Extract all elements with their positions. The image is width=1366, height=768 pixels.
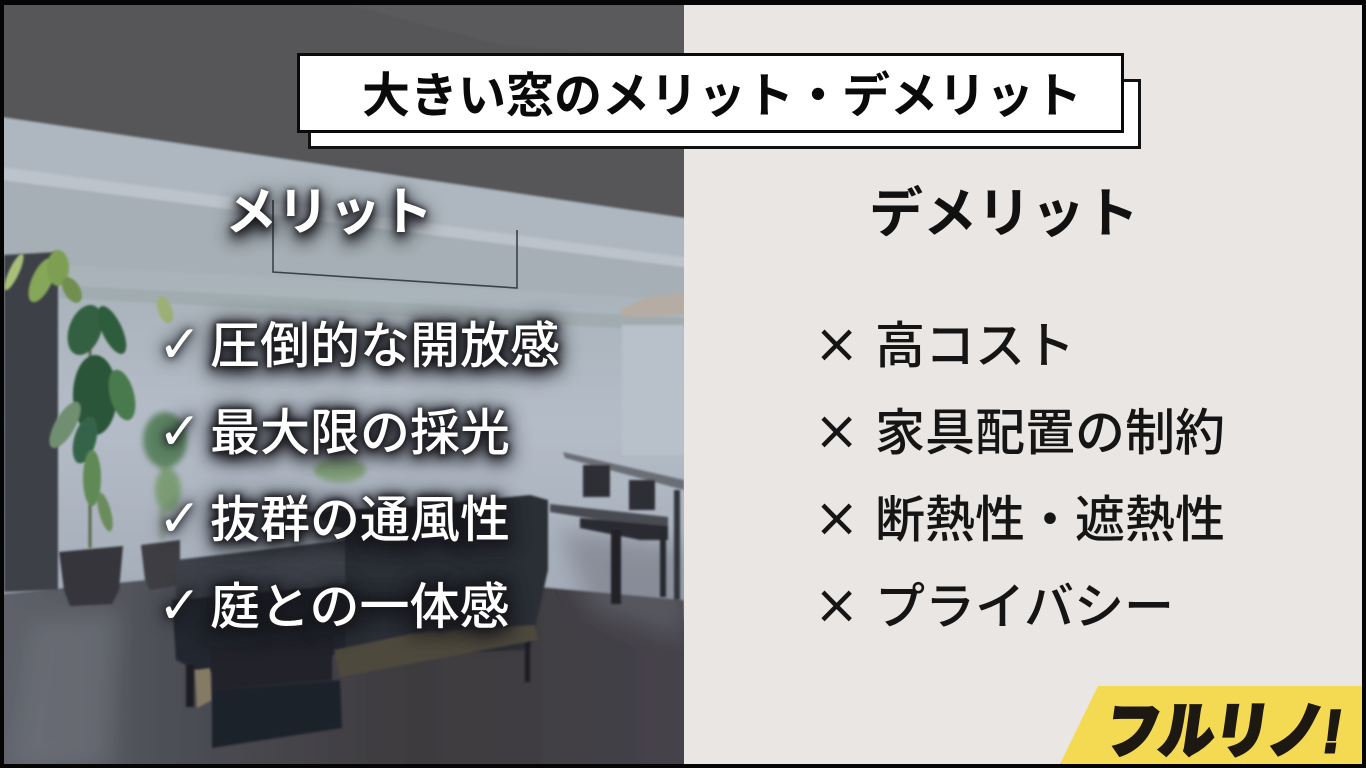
ottoman [212,635,342,748]
rug [334,625,538,677]
merit item 1: 圧倒的な開放感 [210,318,560,374]
merit item 4: 庭との一体感 [210,579,510,635]
merit item 3: ✓ [158,489,202,549]
plant right [143,412,366,540]
heading: merits: メリット [225,184,433,242]
heading: demerits: デメリット [869,184,1139,244]
demerit item 3: × [814,486,859,549]
merit item 1 [153,305,575,390]
demerit item 1 [814,312,1075,375]
merit item 3 [153,479,516,560]
panel: demerit background [684,0,1366,768]
merit list [153,305,575,645]
plant left [1,250,176,548]
curtain [4,252,58,592]
merit item 4 [158,572,519,645]
plant pots [59,540,180,606]
demerit item 3: 断熱性・遮熱性 [875,492,1225,548]
demerit item 2: × [814,399,859,462]
demerit item 1: 高コスト [875,318,1075,374]
title box [297,53,1124,133]
title: 大きい窓のメリット・デメリット [362,70,1082,123]
recessed ceiling box [273,200,517,288]
merit item 2: 最大限の採光 [210,405,510,461]
logo badge [1060,686,1362,764]
demerit item 1: × [814,312,859,375]
merit item 3: 抜群の通風性 [210,492,510,548]
demerit item 4: プライバシー [875,579,1174,635]
demerit item 2: 家具配置の制約 [875,405,1225,461]
panel: merit photo background [4,5,684,764]
sofa [172,495,548,707]
merit item 2 [156,392,524,476]
logo yellow shape [1060,686,1362,764]
merit item 1: ✓ [158,315,202,375]
merit item 2: ✓ [158,402,202,462]
title back plate [308,79,1141,149]
table and bench [550,452,684,604]
merit item 4: ✓ [158,576,202,636]
demerit list [814,312,1225,636]
demerit item 4: × [814,573,859,636]
air conditioner [620,292,684,318]
